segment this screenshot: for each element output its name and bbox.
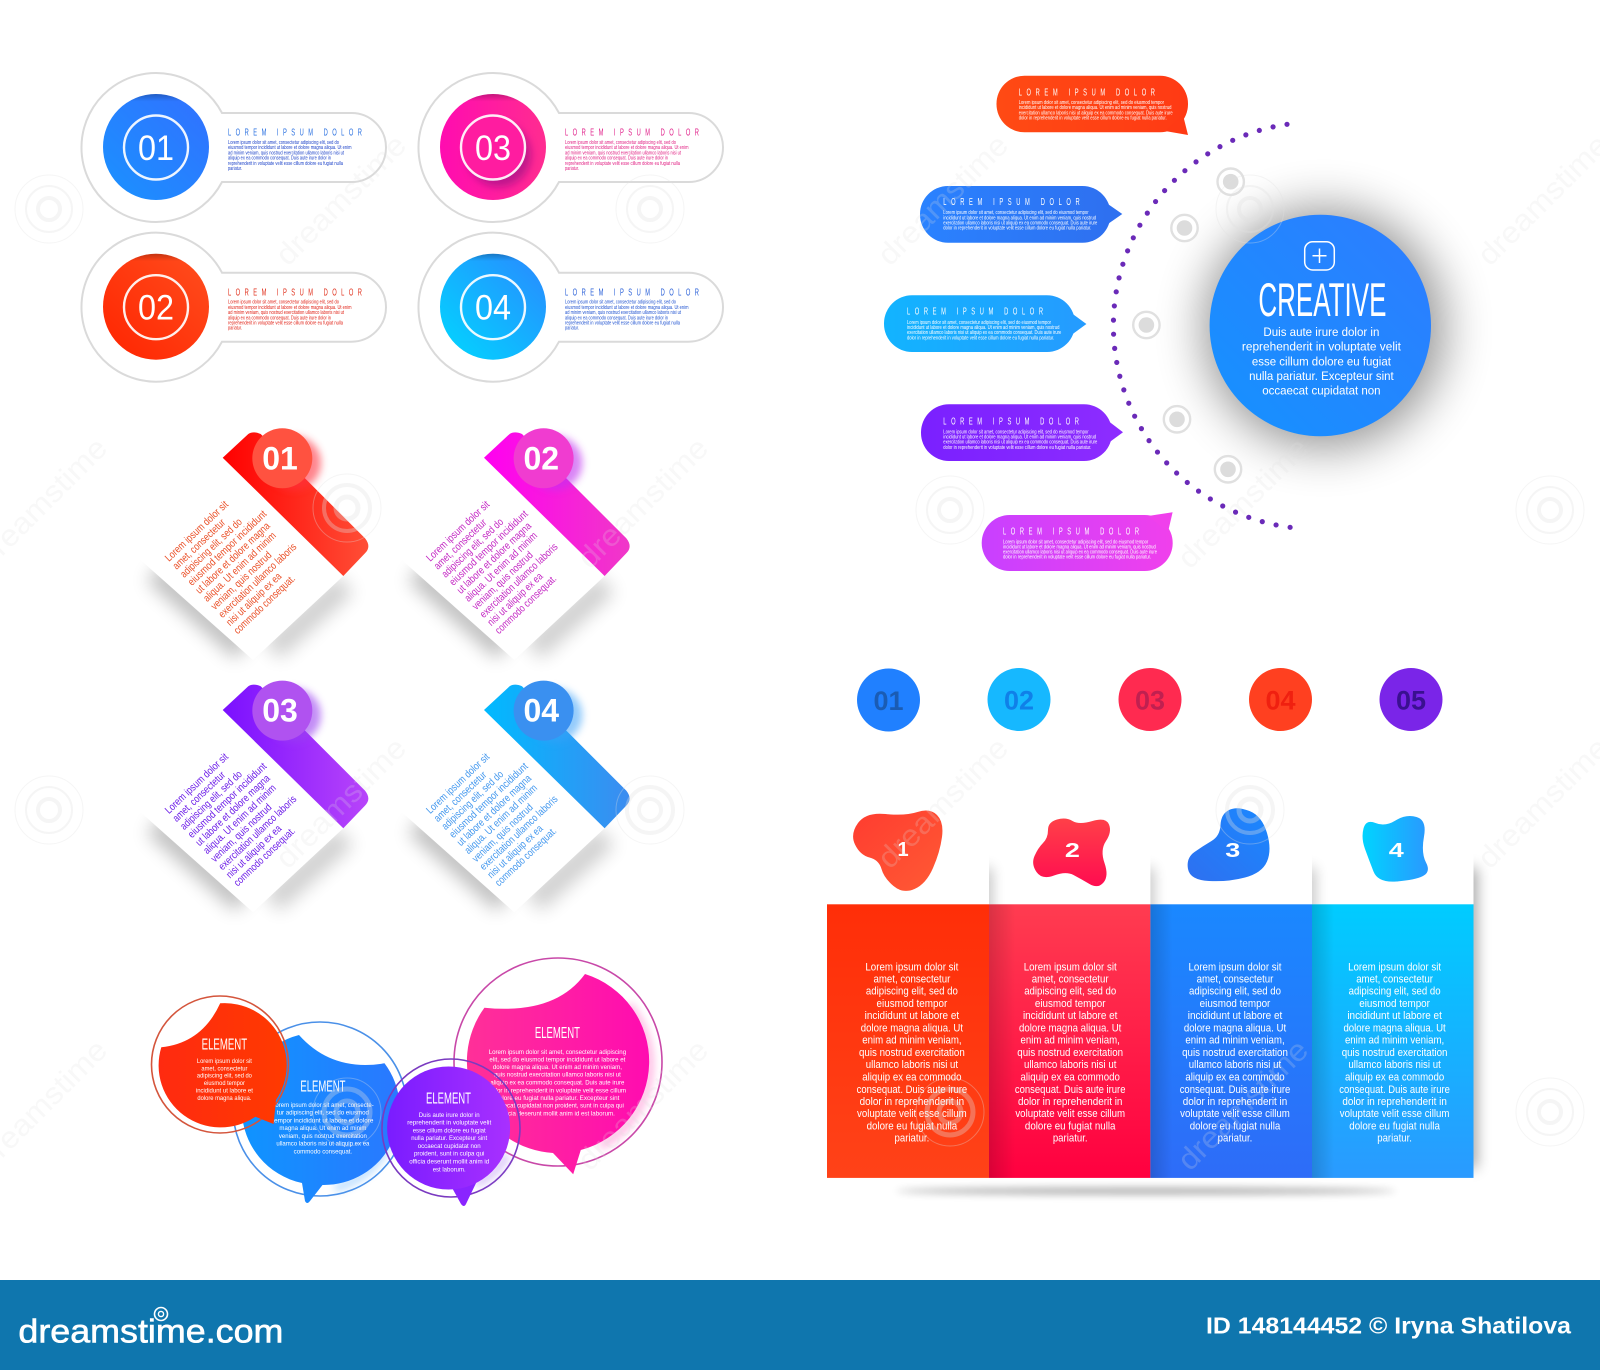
speech bubble: purple	[921, 404, 1123, 461]
speech bubble: blue: LOREM IPSUM DOLOR	[943, 195, 1080, 207]
footer credit: ID 148144452 © Iryna Shatilova	[1206, 1312, 1571, 1338]
watermark wordmarks: dreamstime	[1172, 432, 1315, 575]
diamond note 02: eiusmod tempor incididunt	[448, 509, 531, 588]
column 2: eiusmod tempor	[1035, 998, 1106, 1010]
card 04: 04	[475, 289, 511, 328]
watermark wordmarks: dreamstime	[872, 129, 1015, 272]
central creative circle: occaecat cupidatat non	[1262, 384, 1381, 398]
column 4	[1312, 816, 1474, 1178]
central creative circle	[1204, 208, 1444, 448]
column 4: incididunt ut labore et	[1347, 1010, 1442, 1022]
diamond note 02	[396, 428, 630, 660]
column 4: adipiscing elit, sed do	[1349, 986, 1441, 998]
column 4: amet, consectetur	[1356, 973, 1433, 985]
column 3: dolore magna aliqua. Ut	[1184, 1022, 1286, 1034]
diamond note 01: Lorem ipsum dolor sit	[163, 499, 231, 564]
speech bubble: red: LOREM IPSUM DOLOR	[1019, 85, 1155, 98]
speech bubble: cyan: exercitation ullamco laboris nisi ut aliquip ex ea commodo consequat. Duis aute irure	[907, 330, 1061, 336]
panel: diamond ribbon notes	[135, 428, 630, 912]
column 2: Lorem ipsum dolor sit	[1024, 961, 1117, 973]
element bubble: red: dolore magna aliqua.	[197, 1095, 251, 1102]
diamond note 04: veniam, quis nostrud	[471, 802, 536, 865]
speech bubble: purple: dolor in reprehenderit in voluptate velit esse cillum dolore eu fugiat nulla pariatur.	[943, 445, 1091, 451]
column 2: aliquip ex ea commodo	[1021, 1072, 1120, 1084]
element bubble: purple	[382, 1059, 520, 1206]
central creative circle: reprehenderit in voluptate velit	[1242, 340, 1401, 354]
speech bubble: pink: exercitation ullamco laboris nisi ut aliquip ex ea commodo consequat. Duis aute irure	[1003, 549, 1157, 555]
speech bubble: blue	[920, 186, 1122, 243]
column 2: incididunt ut labore et	[1023, 1010, 1117, 1022]
diamond note 03: Lorem ipsum dolor sit	[163, 752, 231, 817]
speech bubble: purple: Lorem ipsum dolor sit amet, consectetur adipiscing elit, sed do eiusmod tempor	[943, 429, 1089, 435]
element bubble: red: adipiscing elit, sed do	[197, 1073, 252, 1080]
column 1: eiusmod tempor	[877, 998, 948, 1010]
central creative circle: esse cillum dolore eu fugiat	[1252, 354, 1391, 368]
speech bubble: red: incididunt ut labore et dolore magna aliqua. Ut enim ad minim veniam, quis nostrud	[1019, 105, 1172, 111]
element bubble: pink: elit, sed do eiusmod tempor incididunt ut labore et	[489, 1056, 625, 1063]
element bubble: purple: esse cillum dolore eu fugiat	[413, 1127, 486, 1134]
column 4: dolore eu fugiat nulla	[1349, 1120, 1440, 1132]
diamond note 01: 01	[262, 440, 298, 476]
footer bar	[0, 1280, 1600, 1370]
row of numbered circles: 04	[1265, 685, 1296, 715]
card 04: reprehenderit in voluptate velit esse cillum dolore eu fugiat nulla	[565, 320, 680, 326]
column 1: incididunt ut labore et	[865, 1010, 959, 1022]
element bubble: pink: aliquip ex ea commodo consequat. Duis aute irure	[490, 1079, 625, 1086]
card 02: ad minim veniam, quis nostrud exercitation ullamco laboris nisi ut	[228, 310, 344, 316]
connector nodes	[1133, 168, 1244, 482]
watermark wordmarks: dreamstime	[1172, 1034, 1315, 1177]
diamond note 02: nisi ut aliquip ex ea	[486, 571, 546, 629]
speech bubble: blue: incididunt ut labore et dolore magna aliqua. Ut enim ad minim veniam, quis nostrud	[943, 215, 1096, 221]
icon: plus in rounded square	[1305, 242, 1334, 270]
element bubble: blue: tempor incididunt ut labore et dolore	[272, 1117, 374, 1124]
column 3: amet, consectetur	[1197, 973, 1274, 985]
element bubble: blue	[233, 1022, 407, 1203]
diamond note 01: commodo consequat.	[232, 573, 298, 637]
element bubble: pink: dolore magna aliqua. Ut enim ad minim veniam,	[493, 1064, 622, 1071]
column 4: ullamco laboris nisi ut	[1348, 1059, 1441, 1071]
diamond note 03: ut labore et dolore magna	[194, 773, 273, 849]
card 04	[418, 233, 723, 382]
column 1: aliquip ex ea commodo	[862, 1072, 962, 1084]
column 2: dolore magna aliqua. Ut	[1019, 1022, 1121, 1034]
row of numbered circles	[857, 668, 1442, 732]
diamond note 02: adipiscing elit, sed do	[440, 517, 506, 580]
column 2: consequat. Duis aute irure	[1015, 1084, 1125, 1096]
column 4: dolore magna aliqua. Ut	[1343, 1022, 1446, 1034]
diamond note 01	[135, 428, 368, 660]
diamond note 01: exercitation ullamco laboris	[217, 542, 299, 621]
element bubble: red: amet, consectetur	[201, 1065, 248, 1072]
speech bubble: purple: exercitation ullamco laboris nisi ut aliquip ex ea commodo consequat. Duis aute irure	[943, 440, 1097, 446]
column shadows	[896, 868, 1477, 1194]
diamond note 01: adipiscing elit, sed do	[179, 517, 245, 580]
column 3: incididunt ut labore et	[1188, 1010, 1282, 1022]
watermark wordmarks: dreamstime	[270, 129, 413, 272]
watermark swirls	[15, 175, 1584, 1146]
blob number 2: 2	[1065, 840, 1080, 862]
card 04: eiusmod tempor incididunt ut labore et dolore magna aliqua. Ut enim	[565, 305, 688, 311]
column 2: enim ad minim veniam,	[1021, 1034, 1120, 1046]
speech bubble: red	[996, 76, 1188, 135]
diamond note 02: veniam, quis nostrud	[471, 550, 536, 613]
column 2: dolor in reprehenderit in	[1018, 1096, 1122, 1108]
speech bubble: cyan: dolor in reprehenderit in voluptate velit esse cillum dolore eu fugiat nulla pariatur.	[907, 335, 1054, 341]
element bubble: blue: Lorem ipsum dolor sit amet, consecte-	[272, 1102, 374, 1109]
column 1: adipiscing elit, sed do	[866, 986, 958, 998]
element bubble: blue: ullamco laboris nisi ut aliquip ex ea	[276, 1141, 370, 1148]
element bubble: red: incididunt ut labore et	[196, 1087, 253, 1094]
column 2: ullamco laboris nisi ut	[1024, 1059, 1116, 1071]
column 4: Lorem ipsum dolor sit	[1348, 961, 1441, 973]
column 3: pariatur.	[1218, 1133, 1252, 1145]
blob number 4: 4	[1389, 840, 1405, 862]
element bubble: blue: tur adipiscing elit, sed do eiusmod	[277, 1110, 369, 1117]
diamond note 03: aliqua. Ut enim ad minim	[202, 783, 279, 857]
column 3: adipiscing elit, sed do	[1189, 986, 1281, 998]
row of numbered circles: 02	[1004, 685, 1034, 715]
column 3: enim ad minim veniam,	[1185, 1034, 1285, 1046]
column 1	[827, 811, 989, 1178]
column 2: voluptate velit esse cillum	[1015, 1108, 1125, 1120]
diamond note 02: 02	[524, 440, 559, 476]
column 3: Lorem ipsum dolor sit	[1188, 961, 1282, 973]
card 03	[418, 73, 723, 222]
element bubble: red: ELEMENT	[202, 1036, 247, 1054]
diamond note 01: amet, consectetur	[171, 517, 228, 572]
column 1: consequat. Duis aute irure	[857, 1084, 967, 1096]
watermark wordmarks	[0, 129, 1600, 1177]
diamond note 01: eiusmod tempor incididunt	[186, 509, 269, 588]
column 1: Lorem ipsum dolor sit	[865, 961, 958, 973]
element bubble: purple: nulla pariatur. Excepteur sint	[411, 1135, 487, 1142]
card 01: 01	[138, 129, 174, 168]
element bubble: blue: veniam, quis nostrud exercitation	[279, 1133, 367, 1140]
element bubble: pink: Lorem ipsum dolor sit amet, consectetur adipiscing	[489, 1049, 626, 1056]
card 03: ad minim veniam, quis nostrud exercitation ullamco laboris nisi ut	[565, 150, 681, 156]
element bubble: pink	[454, 958, 662, 1174]
card 04: ad minim veniam, quis nostrud exercitation ullamco laboris nisi ut	[565, 310, 681, 316]
column 3: dolor in reprehenderit in	[1183, 1096, 1287, 1108]
element bubble: pink: officia deserunt mollit anim id est laborum.	[500, 1111, 615, 1118]
card 02	[81, 233, 386, 382]
column 4: enim ad minim veniam,	[1345, 1034, 1444, 1046]
column 1: dolor in reprehenderit in	[860, 1096, 964, 1108]
card 04: Lorem ipsum dolor sit amet, consectetur adipiscing elit, sed do	[565, 300, 676, 306]
card 03: LOREM IPSUM DOLOR	[565, 126, 699, 138]
diamond note 03	[135, 681, 368, 912]
element bubble: blue: ELEMENT	[300, 1078, 346, 1096]
card 03: pariatur.	[565, 166, 579, 172]
diamond note 03: eiusmod tempor incididunt	[186, 761, 269, 841]
column 4: pariatur.	[1377, 1133, 1412, 1145]
diamond note 04: commodo consequat.	[493, 826, 559, 889]
column 3: eiusmod tempor	[1200, 998, 1271, 1010]
column 3: voluptate velit esse cillum	[1180, 1108, 1290, 1120]
speech bubble: pink: LOREM IPSUM DOLOR	[1003, 524, 1139, 537]
column 1: dolore magna aliqua. Ut	[861, 1022, 963, 1034]
card 01: pariatur.	[228, 166, 242, 172]
card 01	[81, 73, 386, 222]
column 1: enim ad minim veniam,	[862, 1034, 962, 1046]
speech bubble: red: Lorem ipsum dolor sit amet, consectetur adipiscing elit, sed do eiusmod tempor	[1019, 100, 1164, 106]
footer logo: dreamstime.com	[18, 1313, 283, 1350]
card 04: LOREM IPSUM DOLOR	[565, 285, 699, 298]
card 01: Lorem ipsum dolor sit amet, consectetur adipiscing elit, sed do	[228, 140, 339, 146]
card 02: LOREM IPSUM DOLOR	[228, 285, 362, 298]
card 04: pariatur.	[565, 326, 579, 332]
element bubble: pink: ELEMENT	[535, 1025, 580, 1042]
diamond note 04: eiusmod tempor incididunt	[448, 761, 531, 841]
diamond note 04: adipiscing elit, sed do	[440, 769, 506, 833]
diamond note 03: exercitation ullamco laboris	[217, 794, 299, 873]
card 02: reprehenderit in voluptate velit esse cillum dolore eu fugiat nulla	[228, 320, 343, 326]
speech bubble: pink	[982, 512, 1173, 571]
element bubble: blue: magna aliqua. Ut enim ad minim	[279, 1125, 367, 1132]
watermark wordmarks: dreamstime	[872, 732, 1015, 875]
speech bubble: red: dolor in reprehenderit in voluptate velit esse cillum dolore eu fugiat nulla pariatur.	[1019, 115, 1167, 121]
card 03: aliquip ex ea commodo consequat. Duis aute irure dolor in	[565, 156, 668, 162]
diamond note 04: 04	[524, 693, 559, 729]
card 01: aliquip ex ea commodo consequat. Duis aute irure dolor in	[228, 156, 331, 162]
column 2: dolore eu fugiat nulla	[1025, 1120, 1115, 1132]
diamond note 04	[396, 681, 630, 912]
speech bubble: cyan: incididunt ut labore et dolore magna aliqua. Ut enim ad minim veniam, quis nostrud	[907, 325, 1060, 331]
element bubble: purple: reprehenderit in voluptate velit	[407, 1120, 491, 1127]
card 03: reprehenderit in voluptate velit esse cillum dolore eu fugiat nulla	[565, 161, 680, 167]
watermark wordmarks: dreamstime	[572, 432, 715, 575]
card 03: 03	[475, 129, 511, 168]
element bubble: pink: dolor in reprehenderit in voluptate velit esse cillum	[489, 1087, 626, 1094]
column 3: consequat. Duis aute irure	[1180, 1084, 1290, 1096]
panel: creative speech bubble diagram	[884, 76, 1444, 571]
diamond note 02: ut labore et dolore magna	[455, 521, 534, 596]
column 4: voluptate velit esse cillum	[1340, 1108, 1449, 1120]
column 1: pariatur.	[895, 1133, 929, 1145]
diamond note 03: amet, consectetur	[171, 769, 228, 825]
blob number 4	[1363, 816, 1428, 882]
column 1: voluptate velit esse cillum	[857, 1108, 967, 1120]
central creative circle: CREATIVE	[1258, 273, 1386, 326]
card 02: 02	[138, 289, 174, 328]
speech bubble: purple: LOREM IPSUM DOLOR	[943, 415, 1079, 427]
column 2: quis nostrud exercitation	[1017, 1047, 1123, 1059]
speech bubble: blue: exercitation ullamco laboris nisi ut aliquip ex ea commodo consequat. Duis aute irure	[943, 220, 1097, 226]
blob number 1: 1	[897, 839, 909, 861]
card 01: ad minim veniam, quis nostrud exercitation ullamco laboris nisi ut	[228, 150, 344, 156]
diamond note 03: 03	[262, 693, 298, 729]
central creative circle: nulla pariatur. Excepteur sint	[1249, 369, 1394, 383]
element bubble: red: Lorem ipsum dolor sit	[197, 1058, 252, 1065]
diamond note 03: veniam, quis nostrud	[209, 802, 274, 865]
speech bubble: purple: incididunt ut labore et dolore magna aliqua. Ut enim ad minim veniam, quis nostrud	[943, 435, 1096, 441]
diamond note 02: amet, consectetur	[432, 517, 490, 572]
column 4: consequat. Duis aute irure	[1339, 1084, 1450, 1096]
diamond note 03: commodo consequat.	[232, 826, 298, 889]
element bubble: purple: Duis aute irure dolor in	[419, 1112, 480, 1119]
column 1: ullamco laboris nisi ut	[866, 1059, 958, 1071]
row of numbered circles: 05	[1396, 685, 1426, 715]
card 02: eiusmod tempor incididunt ut labore et dolore magna aliqua. Ut enim	[228, 305, 352, 311]
card 04: aliquip ex ea commodo consequat. Duis aute irure dolor in	[565, 315, 668, 321]
column 2: pariatur.	[1053, 1133, 1088, 1145]
element bubble: purple: ELEMENT	[426, 1090, 471, 1108]
diamond note 04: ut labore et dolore magna	[455, 773, 534, 849]
element bubble: purple: occaecat cupidatat non	[418, 1143, 481, 1150]
diamond note 04: amet, consectetur	[432, 769, 490, 825]
card 03: eiusmod tempor incididunt ut labore et dolore magna aliqua. Ut enim	[565, 145, 688, 151]
speech bubble: blue: dolor in reprehenderit in voluptate velit esse cillum dolore eu fugiat nulla pariatur.	[943, 226, 1091, 232]
speech bubble: cyan	[884, 295, 1086, 352]
column 4: eiusmod tempor	[1359, 998, 1430, 1010]
column 2	[989, 819, 1150, 1178]
card 01: reprehenderit in voluptate velit esse cillum dolore eu fugiat nulla	[228, 161, 343, 167]
diamond note 04: exercitation ullamco laboris	[478, 794, 560, 873]
diamond note 02: aliqua. Ut enim ad minim	[463, 531, 540, 604]
diamond note 04: nisi ut aliquip ex ea	[486, 823, 546, 881]
column 1: dolore eu fugiat nulla	[867, 1120, 957, 1132]
diamond note 02: exercitation ullamco laboris	[478, 542, 560, 621]
diamond note 02: Lorem ipsum dolor sit	[425, 499, 492, 564]
diamond note 03: adipiscing elit, sed do	[179, 769, 245, 833]
column 1: quis nostrud exercitation	[859, 1047, 965, 1059]
diamond note 01: aliqua. Ut enim ad minim	[202, 531, 279, 604]
element bubble: red: eiusmod tempor	[204, 1080, 246, 1087]
blob number 1	[853, 811, 942, 891]
panel: four color columns with blobs	[827, 808, 1477, 1194]
speech bubble: red: exercitation ullamco laboris nisi ut aliquip ex ea commodo consequat. Duis aute irure	[1019, 110, 1173, 116]
row of numbered circles: 01	[873, 686, 904, 716]
card 02: Lorem ipsum dolor sit amet, consectetur adipiscing elit, sed do	[228, 300, 339, 306]
column 3: quis nostrud exercitation	[1182, 1047, 1288, 1059]
diamond note 04: aliqua. Ut enim ad minim	[463, 783, 540, 857]
row of numbered circles: 03	[1135, 685, 1165, 715]
element bubble: red	[152, 996, 288, 1133]
speech bubble: cyan: Lorem ipsum dolor sit amet, consectetur adipiscing elit, sed do eiusmod tempor	[907, 320, 1051, 326]
element bubble: blue: commodo consequat.	[294, 1148, 352, 1155]
card 02: aliquip ex ea commodo consequat. Duis aute irure dolor in	[228, 315, 331, 321]
diamond note 02: commodo consequat.	[493, 573, 559, 637]
diamond note 04: Lorem ipsum dolor sit	[425, 752, 492, 817]
panel: numbered pill cards	[81, 73, 723, 382]
dotted arc connector	[1113, 124, 1294, 528]
element bubble: purple: proident, sunt in culpa qui	[414, 1151, 485, 1158]
column 3: ullamco laboris nisi ut	[1189, 1059, 1281, 1071]
speech bubble: cyan: LOREM IPSUM DOLOR	[907, 305, 1043, 317]
card 01: eiusmod tempor incididunt ut labore et dolore magna aliqua. Ut enim	[228, 145, 352, 151]
column 2: amet, consectetur	[1032, 973, 1109, 985]
column 4: dolor in reprehenderit in	[1342, 1096, 1447, 1108]
speech bubble: pink: dolor in reprehenderit in voluptate velit esse cillum dolore eu fugiat nulla pariatur.	[1003, 555, 1151, 561]
card 03: Lorem ipsum dolor sit amet, consectetur adipiscing elit, sed do	[565, 140, 676, 146]
card 01: LOREM IPSUM DOLOR	[228, 126, 362, 138]
element bubble: purple: est laborum.	[433, 1166, 466, 1173]
panel: overlapping element bubbles	[152, 958, 662, 1206]
speech bubble: pink: incididunt ut labore et dolore magna aliqua. Ut enim ad minim veniam, quis nostrud	[1003, 544, 1156, 550]
speech bubble: pink: Lorem ipsum dolor sit amet, consectetur adipiscing elit, sed do eiusmod tempor	[1003, 539, 1149, 545]
speech bubble: blue: Lorem ipsum dolor sit amet, consectetur adipiscing elit, sed do eiusmod tempor	[943, 210, 1089, 216]
diamond note 03: nisi ut aliquip ex ea	[225, 823, 284, 881]
element bubble: pink: quis nostrud exercitation ullamco laboris nisi ut	[494, 1072, 621, 1079]
column 3: aliquip ex ea commodo	[1185, 1072, 1285, 1084]
column 3	[1150, 808, 1312, 1178]
diamond note 01: nisi ut aliquip ex ea	[225, 571, 284, 629]
card 02: pariatur.	[228, 326, 242, 332]
diamond note 01: veniam, quis nostrud	[209, 550, 274, 613]
column 3: dolore eu fugiat nulla	[1190, 1120, 1280, 1132]
column 4: aliquip ex ea commodo	[1345, 1072, 1444, 1084]
central creative circle: Duis aute irure dolor in	[1263, 325, 1379, 339]
blob number 2	[1033, 819, 1110, 886]
watermark wordmarks: dreamstime	[572, 1034, 715, 1177]
diamond note 01: ut labore et dolore magna	[194, 521, 273, 596]
column 4: quis nostrud exercitation	[1342, 1047, 1448, 1059]
watermark wordmarks: dreamstime	[270, 732, 413, 875]
blob number 3: 3	[1225, 840, 1240, 862]
element bubble: purple: officia deserunt mollit anim id	[409, 1158, 489, 1165]
blob number 3	[1188, 808, 1270, 881]
column 2: adipiscing elit, sed do	[1024, 986, 1116, 998]
element bubble: pink: dolore eu fugiat nulla pariatur. Excepteur sint	[495, 1095, 619, 1102]
column 1: amet, consectetur	[874, 973, 951, 985]
element bubble: pink: occaecat cupidatat non proident, sunt in culpa qui	[491, 1103, 624, 1110]
